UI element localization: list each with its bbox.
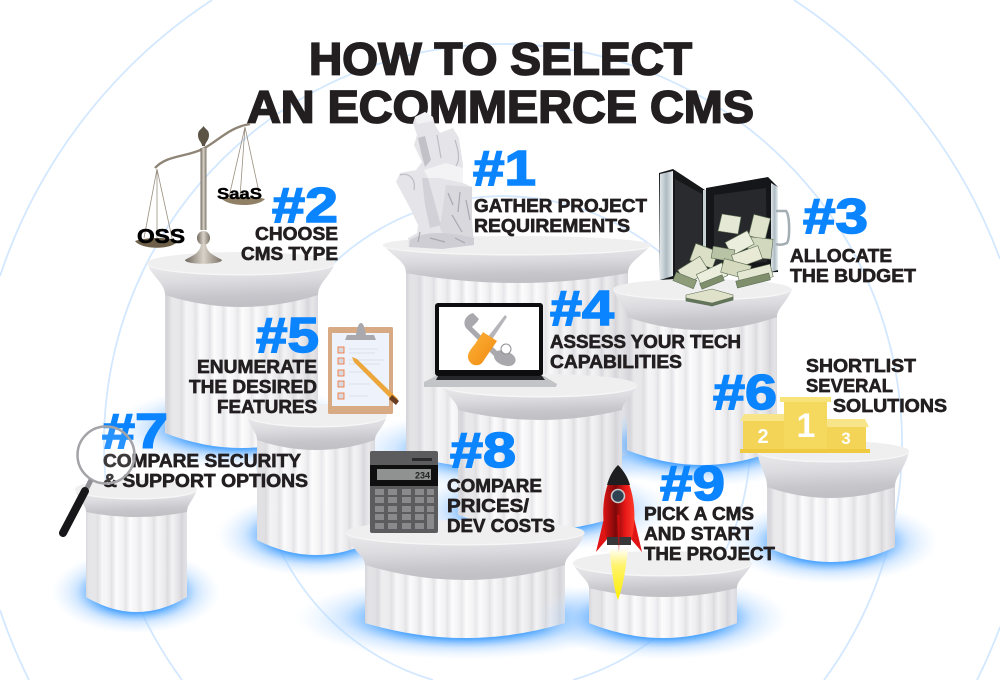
step 3: allocate budget <box>659 169 917 306</box>
label 1: GATHER PROJECT <box>474 195 648 216</box>
pedestal 2 <box>111 252 371 470</box>
pedestal 3 <box>574 279 830 487</box>
label 3: ALLOCATE <box>790 245 892 266</box>
step 6: shortlist solutions <box>713 355 947 453</box>
label 7 <box>103 450 308 491</box>
icon: rocket <box>596 465 642 600</box>
icon: briefcase with money <box>659 169 789 306</box>
label 2 <box>241 223 338 264</box>
step 1: gather requirements <box>396 112 648 249</box>
step 9: pick a CMS <box>596 457 776 600</box>
label 6 <box>806 355 947 416</box>
label: OSS: OSS <box>137 226 185 248</box>
label 9 <box>644 503 776 564</box>
step 4: assess tech capabilities <box>424 282 741 387</box>
label 4 <box>550 331 741 372</box>
number 7: #7 <box>102 405 168 459</box>
label 2: CHOOSE <box>255 223 338 244</box>
label 9: THE PROJECT <box>644 543 776 564</box>
number 2: #2 <box>272 179 338 233</box>
icon: gold podium: 1 <box>797 407 815 445</box>
title: AN ECOMMERCE CMS <box>247 82 754 132</box>
label 8: PRICES/ <box>447 495 529 516</box>
number 1: #1 <box>473 142 536 196</box>
number 9: #9 <box>660 457 725 511</box>
pedestal 5 <box>216 404 416 577</box>
title: HOW TO SELECT <box>309 34 692 84</box>
step 7: compare security <box>63 405 308 533</box>
label 3 <box>790 245 917 286</box>
label 5: FEATURES <box>217 396 317 417</box>
label: SaaS: SaaS <box>217 186 262 203</box>
pedestal 9 <box>537 551 789 660</box>
icon: gold podium: 3 <box>841 429 851 448</box>
icon: gold podium: 2 <box>757 426 769 448</box>
label 6: SEVERAL <box>806 375 893 396</box>
pedestal 7 <box>51 480 221 634</box>
label 1 <box>474 195 648 236</box>
pedestal 6 <box>723 441 939 584</box>
pedestal 8 <box>295 520 635 660</box>
icon: magnifying glass <box>63 426 134 533</box>
step 5: enumerate features <box>189 309 399 417</box>
label 6: SOLUTIONS <box>833 395 947 416</box>
label 8 <box>447 475 555 536</box>
label 9: PICK A CMS <box>644 503 754 524</box>
number 5: #5 <box>256 309 319 363</box>
step 2: choose CMS type <box>135 124 338 264</box>
label 5: THE DESIRED <box>189 376 317 397</box>
icon: calculator: 234 <box>415 470 430 480</box>
label 9: AND START <box>644 523 754 544</box>
label 5: ENUMERATE <box>197 356 317 377</box>
number 4: #4 <box>550 282 614 336</box>
label 2: CMS TYPE <box>241 243 338 264</box>
icon: clipboard with pencil <box>328 323 399 414</box>
step 8: compare prices <box>370 424 555 536</box>
label 7: & SUPPORT OPTIONS <box>103 470 308 491</box>
label 3: THE BUDGET <box>790 265 917 286</box>
label 7: COMPARE SECURITY <box>103 450 302 471</box>
icon: laptop with tools <box>424 303 557 387</box>
number 8: #8 <box>450 424 516 478</box>
label 4: ASSESS YOUR TECH <box>550 331 741 352</box>
label 5 <box>189 356 317 417</box>
pedestal 1 <box>347 236 687 492</box>
number 3: #3 <box>803 190 868 244</box>
icon: thinker statue <box>396 112 474 249</box>
label 8: DEV COSTS <box>447 515 555 536</box>
label 6: SHORTLIST <box>806 355 917 376</box>
pedestal 4 <box>405 374 675 552</box>
number 6: #6 <box>713 366 777 420</box>
icon: balance scales <box>135 124 265 264</box>
label 8: COMPARE <box>447 475 542 496</box>
title <box>247 34 754 132</box>
label 1: REQUIREMENTS <box>474 215 630 236</box>
icon: calculator <box>370 451 438 533</box>
icon: gold podium <box>740 397 870 453</box>
label 4: CAPABILITIES <box>550 351 682 372</box>
